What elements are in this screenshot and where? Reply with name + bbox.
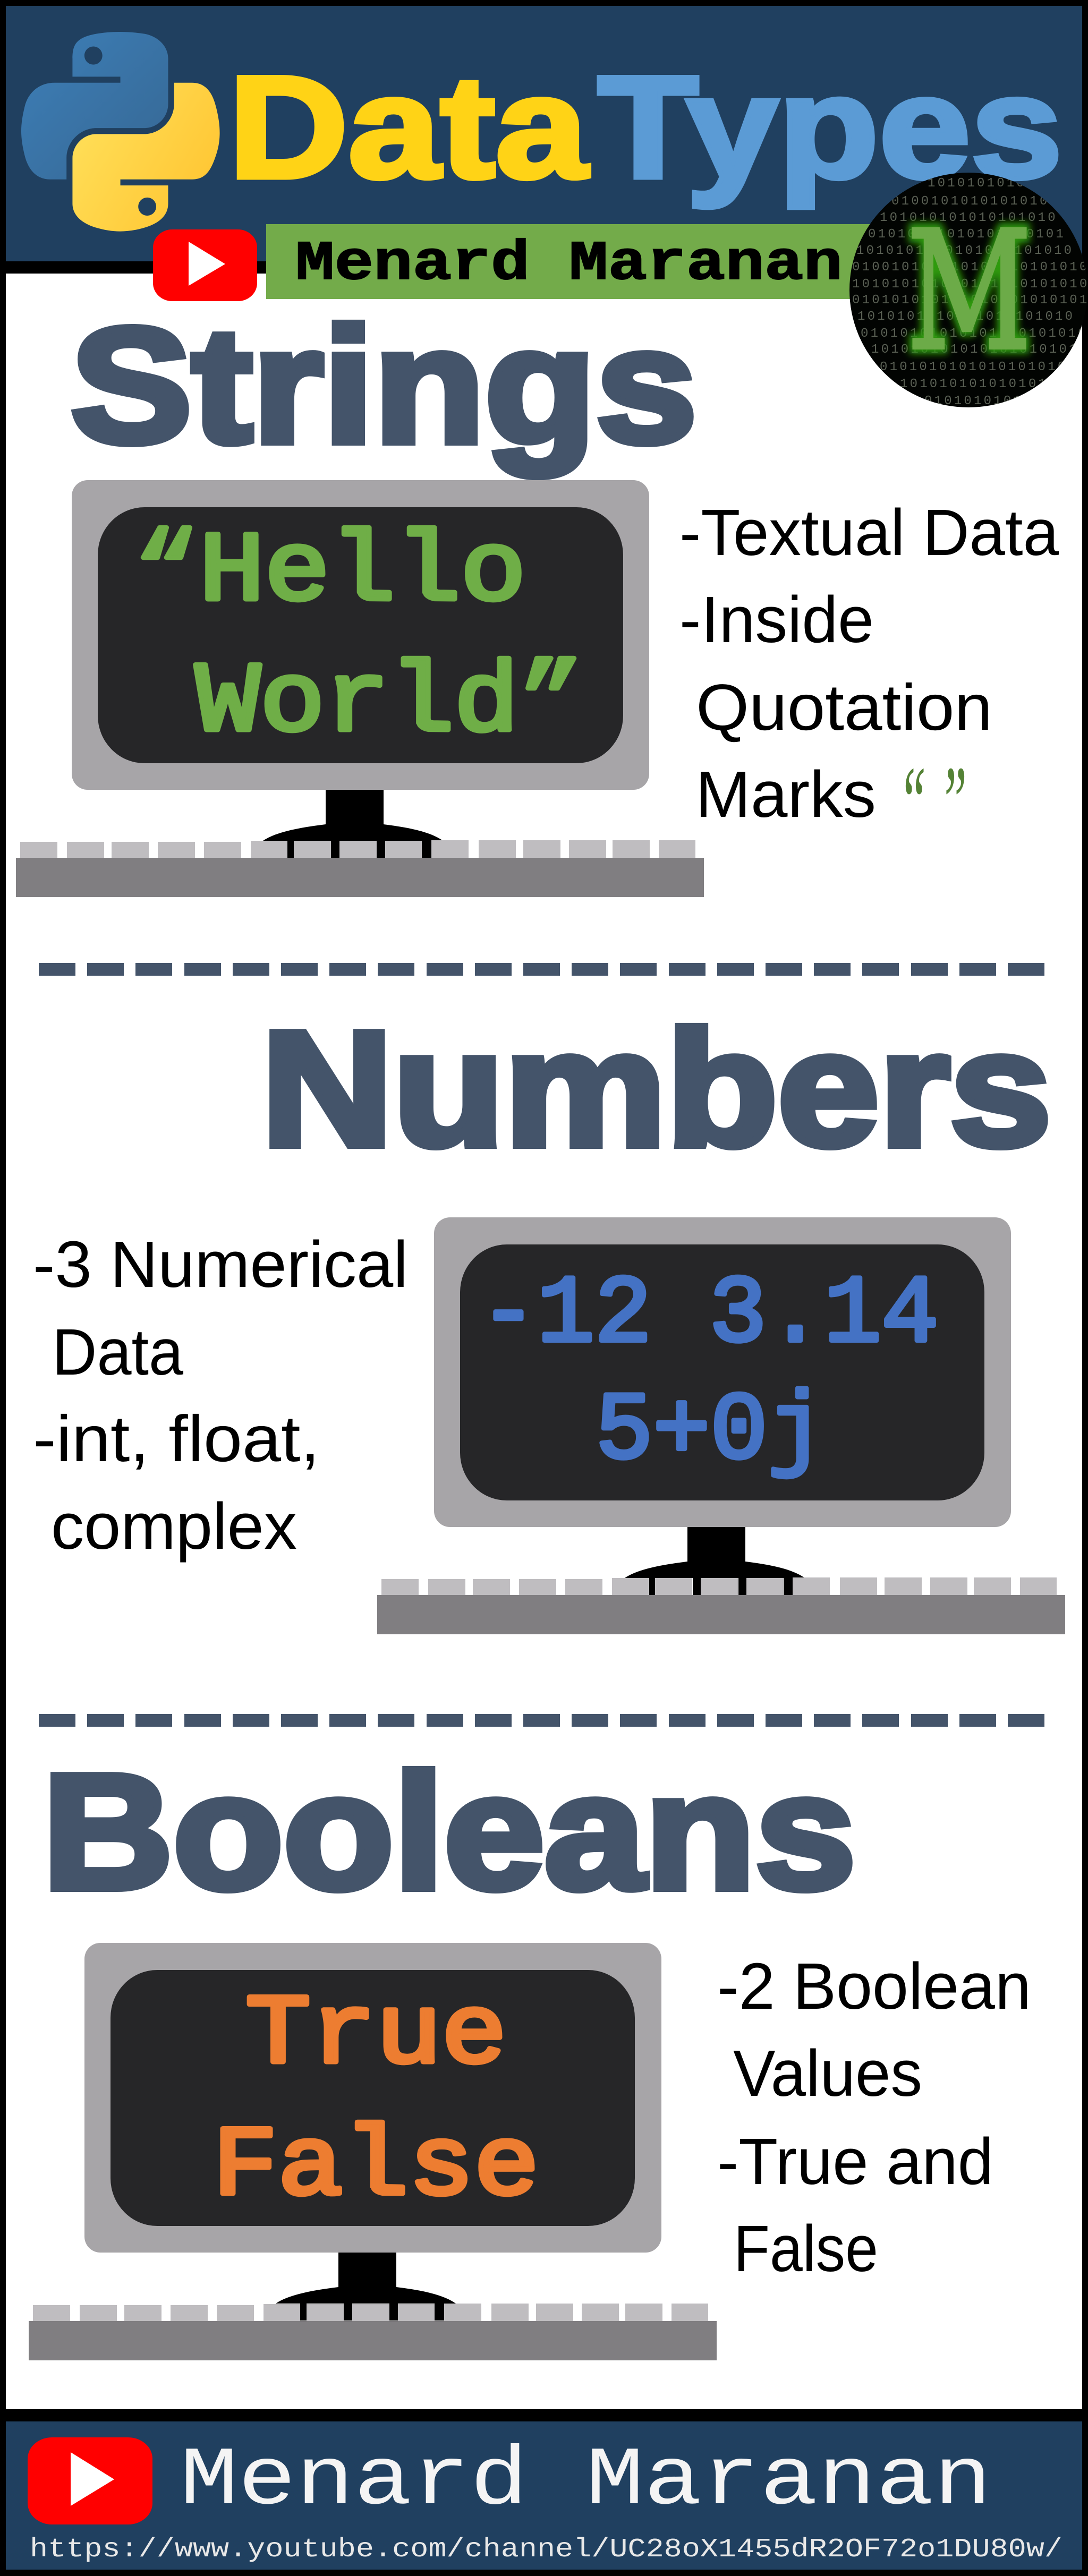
text: booleans description <box>717 1950 1031 2285</box>
monitor screen <box>460 1244 984 1500</box>
text: booleans description: False <box>734 2213 878 2285</box>
footer panel <box>6 2421 1082 2570</box>
screen text: “Hello <box>134 517 526 629</box>
text: strings description <box>679 497 1059 858</box>
icon: M avatar: 01010101010101010101010 <box>861 327 1088 341</box>
text: booleans description: -2 Boolean <box>717 1950 1031 2023</box>
computer: Numbers <box>377 1217 1065 1634</box>
screen text: False <box>212 2111 539 2223</box>
computer: Booleans <box>29 1943 717 2360</box>
heading: Numbers: Numbers <box>261 997 1051 1180</box>
icon: python logo <box>21 32 220 232</box>
icon: M avatar: 101010101010101010 <box>880 211 1058 225</box>
divider 2 <box>39 1714 1044 1727</box>
monitor screen <box>98 507 623 763</box>
text: numbers description: complex <box>51 1490 297 1563</box>
icon: M avatar: 01010101010101010101 <box>868 227 1066 242</box>
icon: M avatar: 0101010101010101010 <box>880 360 1067 374</box>
icon: M avatar: 1010101010101010101010 <box>856 244 1074 258</box>
icon: M avatar <box>845 170 1088 409</box>
text: booleans description: Values <box>733 2037 922 2110</box>
title: Types: Types <box>598 46 1062 209</box>
monitor bezel <box>72 480 649 790</box>
icon: M avatar: 1010101010101010101010 <box>857 310 1075 324</box>
heading: Booleans: Booleans <box>42 1741 856 1923</box>
heading: Strings: Strings <box>71 294 697 477</box>
computer: Strings <box>16 480 704 897</box>
icon: M avatar: 10101010101 <box>928 176 1036 191</box>
icon: M avatar: 010010101010101010101010 <box>852 260 1088 275</box>
title: Data: Data <box>228 46 589 209</box>
text: strings description: Quotation <box>696 671 992 744</box>
monitor stand <box>263 790 443 841</box>
channel name banner <box>266 224 872 299</box>
text: numbers description: -3 Numerical <box>33 1229 408 1301</box>
monitor bezel <box>84 1943 661 2253</box>
screen text: 5+0j <box>596 1378 825 1487</box>
screen text <box>134 517 583 760</box>
screen text <box>212 1980 539 2223</box>
keyboard <box>29 2304 717 2360</box>
monitor stand <box>625 1527 805 1595</box>
text: strings description: “ ” <box>898 746 967 858</box>
footer url: https://www.youtube.com/channel/UC28oX1455dR2OF72o1DU80w/ <box>30 2535 1062 2565</box>
keyboard <box>16 840 704 897</box>
icon: M avatar: 101010101010101010101010 <box>852 277 1088 292</box>
screen text: World” <box>196 647 583 760</box>
text: strings description: -Textual Data <box>679 497 1059 569</box>
text: numbers description <box>33 1229 408 1563</box>
screen text: -12 3.14 <box>480 1261 939 1370</box>
divider 1 <box>39 963 1044 976</box>
text: strings description: -Inside <box>679 584 874 656</box>
icon: youtube logo top <box>153 229 257 301</box>
monitor stand <box>276 2253 456 2321</box>
monitor screen <box>110 1970 635 2226</box>
icon: youtube logo footer <box>28 2437 152 2524</box>
screen text <box>480 1261 939 1487</box>
channel name banner: Menard Maranan <box>295 233 843 296</box>
header panel <box>6 6 1082 261</box>
screen text: True <box>245 1980 507 2092</box>
icon: M avatar: M <box>907 196 1032 387</box>
icon: M avatar: 010101010101010101010101 <box>852 293 1088 308</box>
icon: M avatar: M <box>907 196 1032 387</box>
footer channel name: Menard Maranan <box>180 2434 992 2528</box>
icon: M avatar: 1010101010101010 <box>900 377 1058 391</box>
monitor bezel <box>434 1217 1011 1527</box>
icon: M avatar: 010101010101 <box>924 394 1043 408</box>
icon: M avatar: 1010101010101010101010 <box>871 343 1088 357</box>
text: numbers description: Data <box>52 1316 184 1389</box>
text: numbers description: -int, float, <box>33 1403 320 1475</box>
icon: M avatar: 0100101010101010 <box>891 194 1050 209</box>
keyboard <box>377 1577 1065 1634</box>
text: booleans description: -True and <box>717 2126 993 2198</box>
text: strings description: Marks <box>695 758 876 831</box>
